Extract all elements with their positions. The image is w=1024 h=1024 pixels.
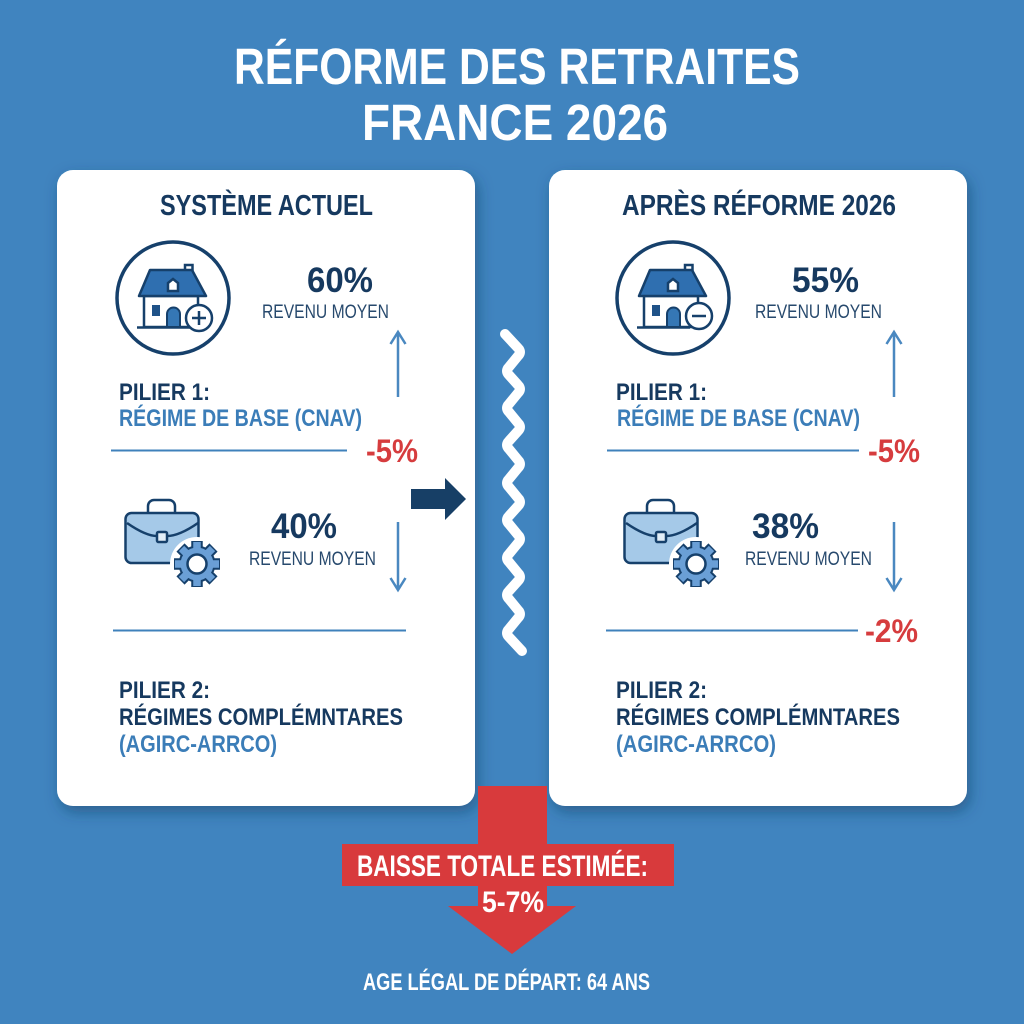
title: RÉFORME DES RETRAITES	[234, 38, 800, 95]
pilier 1 label: RÉGIME DE BASE (CNAV)	[617, 404, 860, 432]
arrow: down	[390, 522, 406, 590]
value: 60% revenu moyen: REVENU MOYEN	[262, 301, 389, 323]
callout: total drop arrow	[342, 786, 674, 954]
pilier 2 label: PILIER 2:	[119, 677, 210, 704]
pilier 2 label: (AGIRC-ARRCO)	[616, 731, 776, 758]
value: 55% revenu moyen: 55%	[792, 261, 859, 300]
delta: -2%: -2%	[865, 613, 918, 649]
value: 60% revenu moyen: 60%	[307, 261, 373, 300]
title	[234, 38, 800, 151]
pilier 2 label	[616, 677, 900, 758]
pilier 1 label	[119, 379, 362, 432]
pilier 2 label	[119, 677, 403, 758]
wavy white divider	[505, 334, 522, 651]
title: FRANCE 2026	[362, 94, 668, 151]
panel: après réforme 2026	[549, 170, 967, 806]
icon: briefcase with gear	[624, 500, 723, 591]
pilier 1 label: PILIER 1:	[616, 379, 707, 406]
icon: briefcase with gear	[126, 500, 224, 591]
pilier 1 label: RÉGIME DE BASE (CNAV)	[119, 404, 362, 432]
value: 38% revenu moyen	[745, 507, 872, 570]
callout value: 5-7%	[482, 886, 544, 919]
panel heading: après réforme: APRÈS RÉFORME 2026	[622, 188, 896, 222]
panel heading: système actuel: SYSTÈME ACTUEL	[160, 188, 373, 222]
value: 40% revenu moyen: REVENU MOYEN	[249, 548, 376, 570]
pilier 2 label: RÉGIMES COMPLÉMNTARES	[616, 703, 900, 731]
arrow: up	[390, 332, 406, 397]
value: 55% revenu moyen: REVENU MOYEN	[755, 301, 882, 323]
pilier 2 label: PILIER 2:	[616, 677, 707, 704]
arrow: navy right arrow	[411, 478, 466, 520]
value: 38% revenu moyen: REVENU MOYEN	[745, 548, 872, 570]
panel: système actuel	[57, 170, 475, 806]
pilier 1 label: PILIER 1:	[119, 379, 210, 406]
icon: house with plus	[117, 242, 229, 354]
value: 38% revenu moyen: 38%	[752, 507, 819, 546]
value: 40% revenu moyen	[249, 507, 376, 570]
footer: legal age: AGE LÉGAL DE DÉPART: 64 ANS	[363, 968, 650, 996]
value: 40% revenu moyen: 40%	[271, 507, 337, 546]
arrow: up	[886, 332, 902, 397]
pilier 2 label: (AGIRC-ARRCO)	[119, 731, 277, 758]
pilier 2 label: RÉGIMES COMPLÉMNTARES	[119, 703, 403, 731]
value: 55% revenu moyen	[755, 261, 882, 323]
pilier 1 label	[616, 379, 860, 432]
icon: house with minus	[617, 242, 729, 354]
callout text: BAISSE TOTALE ESTIMÉE:	[357, 849, 648, 883]
arrow: down	[886, 522, 902, 590]
delta: -5%: -5%	[366, 433, 418, 469]
delta: -5%: -5%	[868, 433, 920, 469]
value: 60% revenu moyen	[262, 261, 389, 323]
